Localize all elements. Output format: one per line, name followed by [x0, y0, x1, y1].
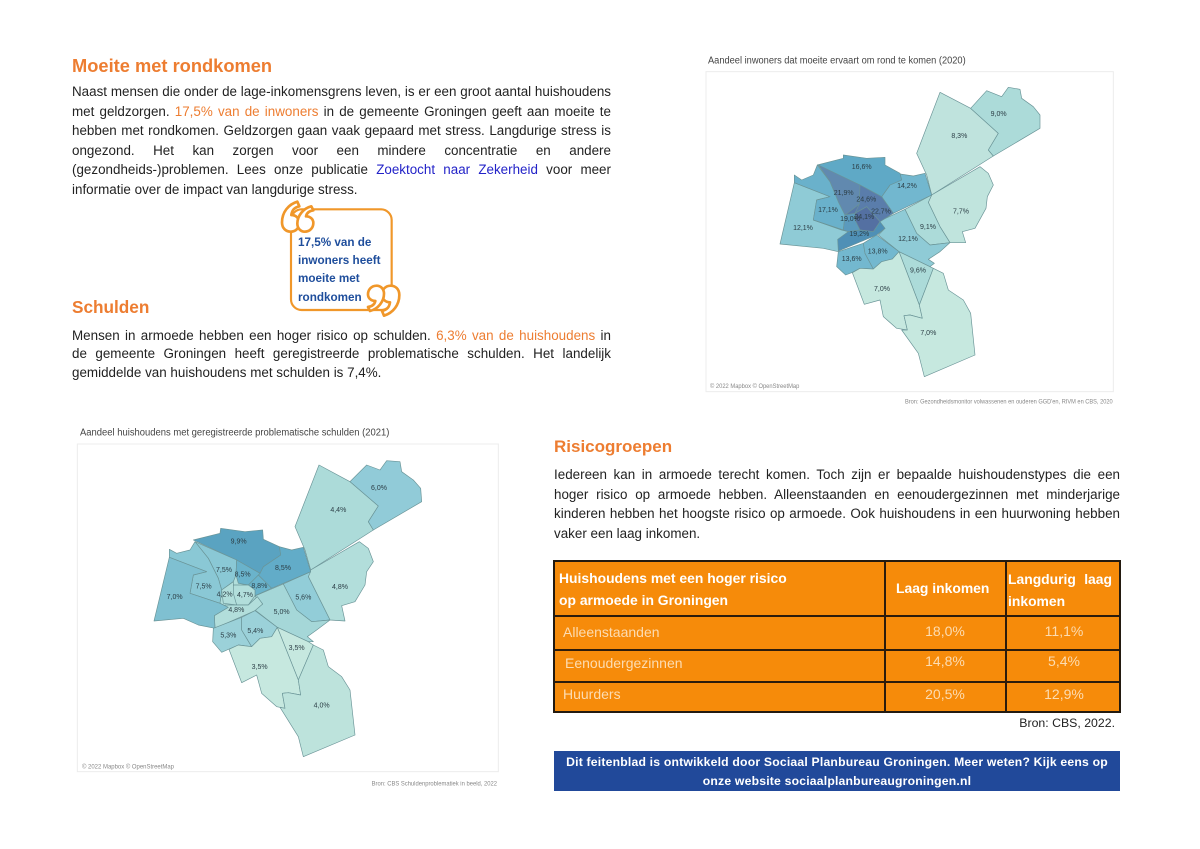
text block: schulden: gemiddelde van huishoudens met schulden is 7,4%.	[72, 365, 381, 380]
text block: risicogroepen: vaker een laag inkomen.	[554, 526, 700, 540]
callout: quote 17,5%: moeite met	[298, 272, 360, 285]
map values: 21,9%	[834, 190, 854, 197]
map regions	[780, 87, 1040, 377]
map values: 24,6%	[856, 197, 876, 204]
value: 12,9%	[1044, 686, 1084, 702]
map title: Aandeel huishoudens met geregistreerde problematische schulden (2021)	[80, 428, 389, 439]
map values: 13,6%	[842, 256, 862, 263]
value: 11,1%	[1045, 623, 1083, 639]
text block: schulden	[72, 328, 611, 380]
map values: 14,2%	[897, 183, 917, 190]
map values: 4,8%	[228, 607, 244, 614]
map: problematische schulden 2021	[77, 428, 499, 787]
map values: 5,0%	[274, 609, 290, 616]
header cell	[559, 570, 787, 608]
row: Alleenstaanden: Alleenstaanden	[563, 624, 660, 640]
callout: quote 17,5%: 17,5% van de	[298, 236, 371, 249]
value: 5,4%	[1048, 653, 1080, 669]
map source: Bron: Gezondheidsmonitor volwassenen en ouderen GGD'en, RIVM en CBS, 2020	[905, 399, 1113, 405]
text block: schulden: Mensen in armoede hebben een hoger risico op schulden. 6,3% van de huishoudens in	[72, 328, 611, 342]
text block: rondkomen: informatie over de impact van langdurige stress.	[72, 182, 358, 196]
text block: risicogroepen	[554, 467, 1120, 541]
text block: rondkomen: ongezond. Het kan zorgen voor een mindere concentratie en andere	[72, 142, 611, 158]
map values: 7,5%	[216, 567, 232, 574]
text block: rondkomen: (gezondheids-)problemen. Lees onze publicatie Zoektocht naar Zekerheid voor meer	[72, 162, 611, 177]
map values: 5,4%	[247, 628, 263, 635]
map values: 8,3%	[951, 133, 967, 140]
map attribution: © 2022 Mapbox © OpenStreetMap	[710, 383, 800, 390]
header cell: Langdurig laag	[1008, 571, 1112, 587]
map values: 16,6%	[852, 164, 872, 171]
row: Huurders: Huurders	[563, 686, 621, 702]
map values: 4,7%	[237, 592, 253, 599]
text block: rondkomen	[72, 84, 611, 197]
map: moeite met rondkomen 2020	[706, 56, 1114, 405]
table: hoger risico op armoede	[553, 560, 1121, 713]
callout: quote 17,5%	[280, 200, 401, 317]
text block: rondkomen: hebben met rondkomen. Geldzorgen gaan vaak gepaard met stress. Langdurige stress is	[72, 123, 611, 138]
text block: rondkomen: Naast mensen die onder de lage-inkomensgrens leven, is er een groot aantal huishoudens	[72, 84, 611, 99]
text block: risicogroepen: Iedereen kan in armoede terecht komen. Toch zijn er bepaalde huishoudenstypes die een	[554, 467, 1120, 482]
heading: Schulden: Schulden	[72, 297, 149, 317]
map values: 4,4%	[330, 507, 346, 514]
text block: rondkomen: met geldzorgen. 17,5% van de inwoners in de gemeente Groningen geeft aan moeite te	[72, 104, 611, 118]
row: Eenoudergezinnen: Eenoudergezinnen	[565, 655, 683, 671]
map values: 9,9%	[231, 539, 247, 546]
map attribution: © 2022 Mapbox © OpenStreetMap	[82, 763, 175, 770]
footer banner: Dit feitenblad is ontwikkeld door Sociaal Planbureau Groningen. Meer weten? Kijk eens op	[566, 755, 1108, 769]
map values: 5,3%	[220, 633, 236, 640]
map values: 5,6%	[295, 595, 311, 602]
map values: 4,2%	[217, 592, 233, 599]
text block: risicogroepen: kinderen hebben het hoogste risico op armoede. Ook huishoudens in een huurwoning hebben	[554, 506, 1120, 521]
map values: 4,0%	[314, 703, 330, 710]
map values: 12,1%	[898, 236, 918, 243]
header cell: op armoede in Groningen	[559, 592, 728, 608]
footer banner: onze website sociaalplanbureaugroningen.nl	[703, 774, 971, 788]
map values: 19,2%	[849, 231, 869, 238]
header cell: inkomen	[1008, 593, 1065, 609]
value: 14,8%	[925, 653, 965, 669]
map values: 4,8%	[332, 584, 348, 591]
map source: Bron: CBS Schuldenproblematiek in beeld, 2022	[372, 781, 498, 787]
map values: 7,7%	[953, 209, 969, 216]
heading: Risicogroepen: Risicogroepen	[554, 437, 672, 456]
value: 18,0%	[925, 623, 965, 639]
map values: 22,7%	[871, 209, 891, 216]
header cell: Laag inkomen	[896, 580, 989, 596]
map values: 8,5%	[275, 565, 291, 572]
header cell	[1008, 571, 1112, 609]
footer banner	[554, 751, 1120, 791]
value: 20,5%	[925, 686, 965, 702]
map values: 3,5%	[289, 645, 305, 652]
map values: 6,0%	[371, 485, 387, 492]
callout: quote 17,5%: inwoners heeft	[298, 254, 380, 267]
map values: 7,5%	[196, 584, 212, 591]
map values: 9,0%	[991, 111, 1007, 118]
map values: 19,0%	[840, 216, 860, 223]
map values: 9,1%	[920, 224, 936, 231]
map regions	[154, 461, 422, 757]
map values: 9,6%	[910, 268, 926, 275]
map title: Aandeel inwoners dat moeite ervaart om rond te komen (2020)	[708, 56, 966, 67]
map values: 8,5%	[235, 572, 251, 579]
map values: 17,1%	[818, 207, 838, 214]
map values: 24,1%	[854, 214, 874, 221]
map values: 12,1%	[793, 225, 813, 232]
map values: 8,8%	[251, 583, 267, 590]
map values: 7,0%	[874, 286, 890, 293]
heading: Moeite met rondkomen: Moeite met rondkomen	[72, 55, 272, 76]
map card	[77, 444, 498, 772]
map values: 7,0%	[920, 330, 936, 337]
text block: schulden: de gemeente Groningen heeft geregistreerde problematische schulden. Het landelijk	[72, 346, 611, 361]
source note: Bron: CBS, 2022.	[1019, 716, 1115, 730]
header cell: Huishoudens met een hoger risico	[559, 570, 787, 586]
callout: quote 17,5%: rondkomen	[298, 291, 362, 304]
map card	[706, 72, 1113, 392]
map values	[793, 111, 1007, 337]
map values: 13,8%	[868, 249, 888, 256]
map values: 7,0%	[167, 594, 183, 601]
map values: 3,5%	[252, 664, 268, 671]
map values	[167, 485, 387, 710]
text block: risicogroepen: hoger risico op armoede hebben. Alleenstaanden en eenoudergezinnen met minderjarige	[554, 486, 1120, 502]
